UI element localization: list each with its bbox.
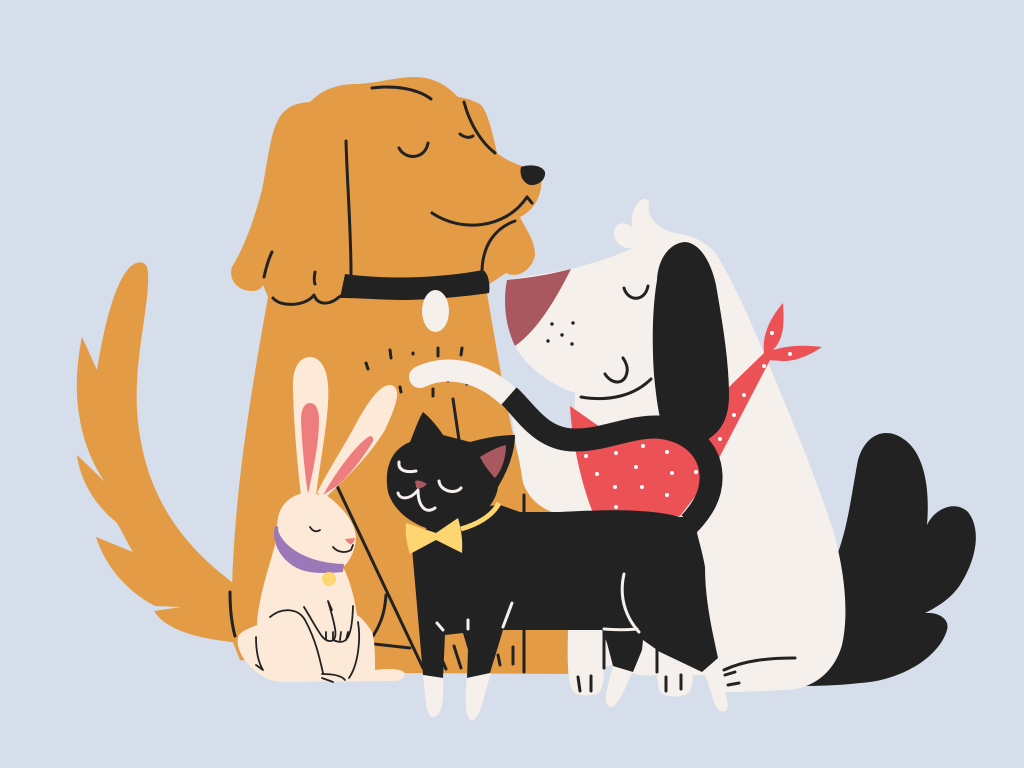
cat tail tip <box>420 371 512 400</box>
cat nose <box>415 480 427 488</box>
cat white socks <box>423 673 491 720</box>
bandana dots <box>584 331 792 509</box>
bandana <box>570 303 822 516</box>
orange dog body and head <box>231 77 580 674</box>
orange dog fur and leg lines <box>230 348 524 672</box>
white dog ear <box>653 242 729 440</box>
orange dog collar <box>340 270 489 300</box>
cat <box>387 371 718 720</box>
rabbit collar <box>274 526 344 573</box>
cat tail <box>509 396 711 523</box>
cat face lines <box>398 462 461 510</box>
orange dog tail <box>77 262 240 643</box>
rabbit <box>238 357 405 682</box>
white dog whisker dots <box>546 321 575 346</box>
white dog muzzle patch <box>505 269 571 346</box>
rabbit ears <box>293 357 328 495</box>
white dog body and head <box>505 199 845 712</box>
white dog face lines <box>581 286 651 399</box>
rabbit inner ears <box>301 403 319 494</box>
cat bow tie <box>406 518 462 554</box>
white dog toe lines <box>578 632 795 691</box>
rabbit lines <box>256 527 359 682</box>
cat inner ear <box>480 445 506 478</box>
white dog <box>505 199 976 712</box>
cat body lines <box>437 574 639 632</box>
orange dog face lines <box>264 87 532 304</box>
cat collar <box>461 503 499 529</box>
orange dog tag <box>422 290 449 332</box>
rabbit body <box>238 493 405 682</box>
orange dog nose <box>520 165 545 185</box>
white dog tail <box>790 433 976 686</box>
rabbit tag <box>322 572 336 586</box>
cat body <box>412 505 718 678</box>
rabbit nose <box>345 538 355 544</box>
orange dog <box>77 77 580 674</box>
cat head <box>387 412 515 532</box>
